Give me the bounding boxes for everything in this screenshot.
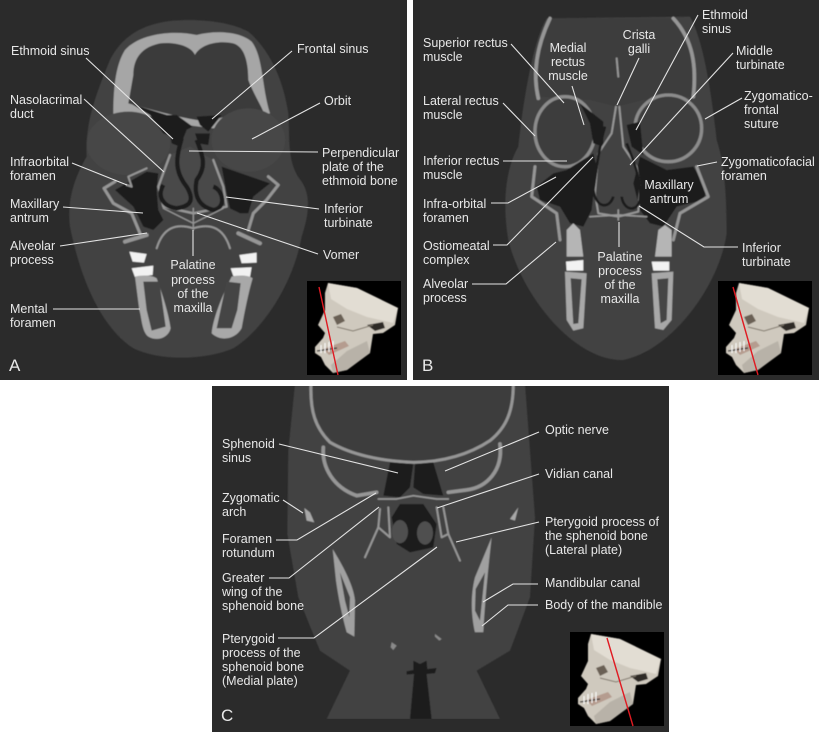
label: Pterygoid process of the sphenoid bone (Medial plate): Pterygoid (222, 632, 275, 646)
label: Crista galli: galli (628, 42, 650, 56)
label: Body of the mandible: Body of the mandible (545, 598, 662, 612)
label: Pterygoid process of the sphenoid bone (Medial plate): sphenoid bone (222, 660, 304, 674)
label: Pterygoid process of the sphenoid bone (Medial plate) (222, 547, 437, 688)
label: Lateral rectus muscle (423, 94, 535, 136)
label: Palatine process of the maxilla (597, 222, 643, 306)
label: Sphenoid sinus: sinus (222, 451, 251, 465)
label: Zygomaticofacial foramen: Zygomaticofacial (721, 155, 815, 169)
label: Ethmoid sinus (636, 8, 748, 130)
label: Frontal sinus (212, 42, 369, 119)
label: Superior rectus muscle (423, 36, 564, 103)
label: Infra-orbital foramen: foramen (423, 211, 469, 225)
label: Frontal sinus: Frontal sinus (297, 42, 369, 56)
label: Perpendicular plate of the ethmoid bone: plate of the (322, 160, 384, 174)
label: Perpendicular plate of the ethmoid bone: Perpendicular (322, 146, 399, 160)
label: Orbit: Orbit (324, 94, 352, 108)
label: Zygomatico-frontal suture: suture (744, 117, 779, 131)
label: Inferior turbinate (226, 197, 373, 230)
label: Nasolacrimal duct (10, 93, 164, 172)
label: Inferior rectus muscle (423, 154, 567, 182)
label: Infraorbital foramen (10, 155, 127, 185)
label: Optic nerve: Optic nerve (545, 423, 609, 437)
label: Inferior turbinate: turbinate (324, 216, 373, 230)
label: Infraorbital foramen: Infraorbital (10, 155, 69, 169)
label: Crista galli: Crista (623, 28, 655, 42)
label: Alveolar process (423, 242, 556, 305)
label: Ethmoid sinus: Ethmoid sinus (11, 44, 90, 58)
label: Maxillary antrum: antrum (650, 192, 688, 206)
label: Alveolar process: process (10, 253, 54, 267)
label: Ethmoid sinus (11, 44, 173, 139)
panel letter: A: A (9, 356, 21, 375)
label: Vomer (197, 213, 359, 262)
label: Lateral rectus muscle: muscle (423, 108, 463, 122)
label: Middle turbinate (630, 44, 785, 165)
label: Inferior rectus muscle: muscle (423, 168, 463, 182)
label: Crista galli (617, 28, 655, 105)
label: Inferior turbinate: Inferior (324, 202, 363, 216)
label: Palatine process of the maxilla: of the (177, 287, 209, 301)
label: Lateral rectus muscle: Lateral rectus (423, 94, 499, 108)
label: Palatine process of the maxilla: Palatine (597, 250, 643, 264)
label: Body of the mandible (482, 598, 662, 626)
CT scan: axial section through the lower orbits and nasal cavity (505, 17, 727, 360)
label: Greater wing of the sphenoid bone (221, 507, 379, 613)
label: Zygomatic arch (222, 491, 303, 519)
label: Ethmoid sinus: sinus (702, 22, 731, 36)
label: Orbit (252, 94, 352, 139)
label: Optic nerve (445, 423, 609, 471)
label: Vidian canal (437, 467, 613, 508)
label: Superior rectus muscle: muscle (423, 50, 463, 64)
label: Vomer: Vomer (323, 248, 359, 262)
label: Alveolar process (10, 233, 147, 267)
label: Medial rectus muscle (548, 41, 588, 125)
label: Palatine process of the maxilla: process (171, 273, 215, 287)
label: Perpendicular plate of the ethmoid bone: ethmoid bone (322, 174, 398, 188)
label: Inferior rectus muscle: Inferior rectus (423, 154, 499, 168)
label: Ostiomeatal complex: Ostiomeatal (423, 239, 490, 253)
label: Palatine process of the maxilla: of the (604, 278, 636, 292)
label: Palatine process of the maxilla (170, 230, 216, 315)
label: Sphenoid sinus: Sphenoid (222, 437, 275, 451)
label: Mandibular canal: Mandibular canal (545, 576, 640, 590)
label: Alveolar process: process (423, 291, 467, 305)
CT scan: coronal section through the sphenoid sinus (287, 384, 535, 719)
label: Mental foramen: Mental (10, 302, 48, 316)
label: Zygomatico-frontal suture (705, 89, 813, 131)
panel: B (413, 0, 819, 380)
label: Medial rectus muscle: muscle (548, 69, 588, 83)
label: Infra-orbital foramen: Infra-orbital (423, 197, 486, 211)
label: Palatine process of the maxilla: process (598, 264, 642, 278)
inset: 3D skull with red section line A (307, 281, 401, 375)
CT scan: axial section through the orbits and maxillary antra (69, 20, 308, 358)
label: Infra-orbital foramen (423, 177, 556, 225)
label: Middle turbinate: turbinate (736, 58, 785, 72)
label: Ostiomeatal complex: complex (423, 253, 470, 267)
label: Zygomatic arch: arch (222, 505, 246, 519)
label: Pterygoid process of the sphenoid bone (Lateral plate): the sphenoid bone (545, 529, 648, 543)
label: Medial rectus muscle: Medial (550, 41, 586, 55)
label: Pterygoid process of the sphenoid bone (Medial plate): (Medial plate) (222, 674, 298, 688)
label: Medial rectus muscle: rectus (551, 55, 585, 69)
label: Maxillary antrum: antrum (10, 211, 49, 225)
label: Mental foramen (10, 302, 140, 330)
label: Zygomaticofacial foramen: foramen (721, 169, 767, 183)
label: Mental foramen: foramen (10, 316, 56, 330)
label: Ostiomeatal complex (423, 157, 593, 267)
label: Palatine process of the maxilla: maxilla (601, 292, 639, 306)
label: Sphenoid sinus (222, 437, 398, 473)
label: Greater wing of the sphenoid bone: wing of the (221, 585, 283, 599)
label: Mandibular canal (483, 576, 640, 602)
panel: A (0, 0, 407, 380)
label: Inferior turbinate: turbinate (742, 255, 791, 269)
label: Greater wing of the sphenoid bone: sphenoid bone (222, 599, 304, 613)
inset: 3D skull with red section line C (570, 632, 664, 726)
label: Palatine process of the maxilla: maxilla (174, 301, 212, 315)
label: Infraorbital foramen: foramen (10, 169, 56, 183)
label: Inferior turbinate: Inferior (742, 241, 781, 255)
label: Foramen rotundum: Foramen (222, 532, 272, 546)
label: Maxillary antrum (644, 178, 694, 206)
label: Greater wing of the sphenoid bone: Greater (222, 571, 264, 585)
label: Zygomatico-frontal suture: frontal (744, 103, 779, 117)
label: Maxillary antrum (10, 197, 143, 225)
label: Palatine process of the maxilla: Palatine (170, 258, 216, 272)
label: Foramen rotundum (222, 493, 376, 560)
label: Pterygoid process of the sphenoid bone (Medial plate): process of the (222, 646, 301, 660)
label: Perpendicular plate of the ethmoid bone (189, 146, 399, 188)
label: Pterygoid process of the sphenoid bone (Lateral plate) (456, 515, 659, 557)
panel: C (212, 384, 669, 732)
label: Foramen rotundum: rotundum (222, 546, 275, 560)
label: Alveolar process: Alveolar (10, 239, 55, 253)
label: Pterygoid process of the sphenoid bone (Lateral plate): (Lateral plate) (545, 543, 622, 557)
label: Zygomaticofacial foramen (697, 155, 815, 183)
label: Maxillary antrum: Maxillary (10, 197, 60, 211)
label: Middle turbinate: Middle (736, 44, 773, 58)
label: Nasolacrimal duct: duct (10, 107, 34, 121)
panel letter: C: C (221, 706, 233, 725)
label: Ethmoid sinus: Ethmoid (702, 8, 748, 22)
label: Alveolar process: Alveolar (423, 277, 468, 291)
label: Zygomatico-frontal suture: Zygomatico- (744, 89, 813, 103)
label: Vidian canal: Vidian canal (545, 467, 613, 481)
panel letter: B: B (422, 356, 433, 375)
label: Zygomatic arch: Zygomatic (222, 491, 280, 505)
label: Nasolacrimal duct: Nasolacrimal (10, 93, 82, 107)
label: Inferior turbinate (639, 206, 791, 269)
label: Superior rectus muscle: Superior rectus (423, 36, 508, 50)
label: Maxillary antrum: Maxillary (644, 178, 694, 192)
label: Pterygoid process of the sphenoid bone (Lateral plate): Pterygoid process of (545, 515, 659, 529)
inset: 3D skull with red section line B (718, 281, 812, 375)
